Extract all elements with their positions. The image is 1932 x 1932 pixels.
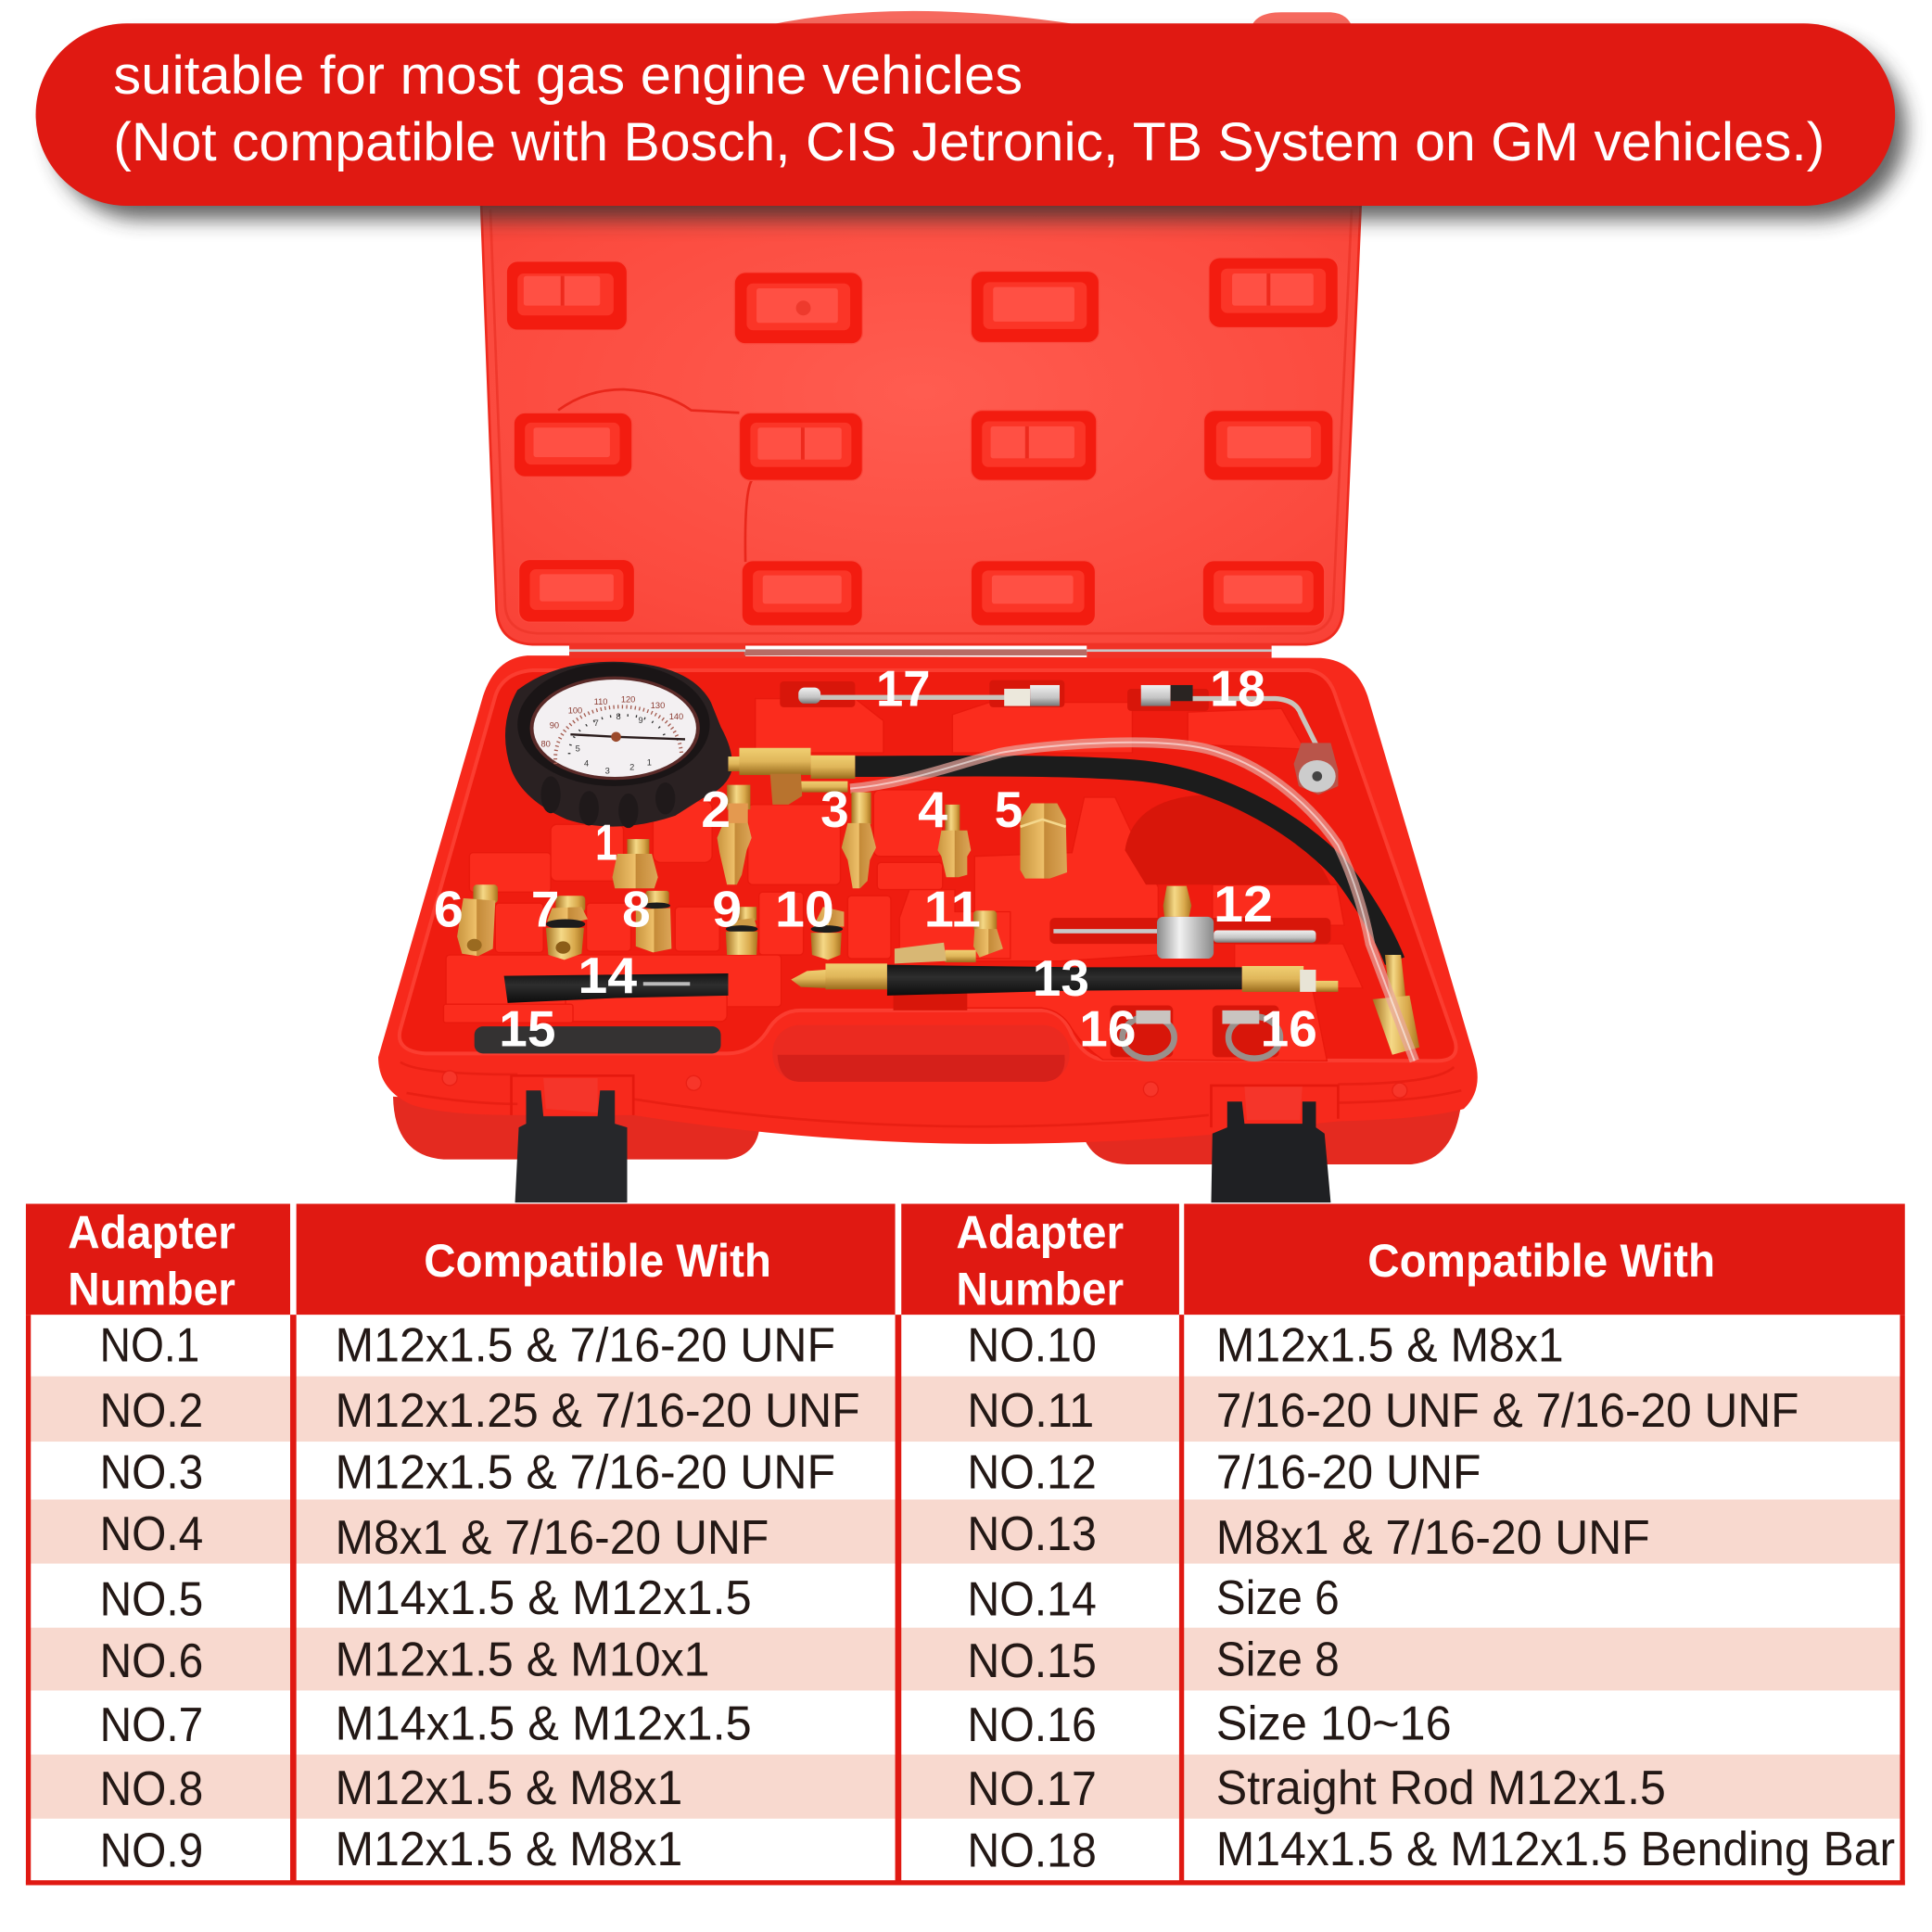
adapter 3 <box>842 793 876 888</box>
adapter numbers left: NO.5 <box>100 1571 203 1625</box>
gauge numbers: 110 <box>594 697 607 706</box>
adapter 4 <box>937 805 971 877</box>
part number labels: 5 <box>995 782 1023 838</box>
table header text: Number <box>68 1262 235 1315</box>
latch right <box>1211 1087 1330 1202</box>
gauge numbers: 140 <box>669 712 683 721</box>
gauge numbers: 90 <box>550 720 559 730</box>
alternating rows <box>31 1377 1900 1819</box>
compatibility values right: 7/16-20 UNF <box>1216 1445 1481 1499</box>
case base <box>378 643 1478 1164</box>
table header text <box>68 1205 1715 1315</box>
part number labels: 17 <box>876 661 930 718</box>
compatibility values right: M8x1 & 7/16-20 UNF <box>1216 1510 1650 1564</box>
gauge numbers: 2 <box>629 763 634 772</box>
table header text: Adapter <box>68 1205 235 1258</box>
latch notches and rivets <box>442 1071 1407 1127</box>
adapter numbers right: NO.17 <box>967 1761 1097 1815</box>
part number labels: 16 <box>1261 1000 1317 1057</box>
recesses <box>780 680 1330 1057</box>
compatibility values right: Straight Rod M12x1.5 <box>1216 1760 1666 1814</box>
gauge numbers: 9 <box>638 716 643 725</box>
rim highlight <box>400 1062 1461 1126</box>
adapter 11 <box>895 910 1003 963</box>
table header text: Adapter <box>956 1205 1124 1258</box>
compatibility values right: M12x1.5 & M8x1 <box>1216 1318 1564 1372</box>
compatibility values left: M14x1.5 & M12x1.5 <box>336 1697 752 1750</box>
compatibility values left: M12x1.5 & M8x1 <box>336 1760 682 1814</box>
adapter 7 <box>546 896 588 960</box>
compatibility values left: M8x1 & 7/16-20 UNF <box>336 1510 769 1564</box>
black hose <box>855 766 1395 961</box>
clamp 16 left <box>1123 1010 1175 1059</box>
clear tube <box>850 743 1415 1061</box>
adapter 1 <box>613 839 658 888</box>
part number labels: 16 <box>1079 1000 1136 1057</box>
table header text: Compatible With <box>424 1234 771 1287</box>
brass T connector <box>728 748 855 805</box>
adapter numbers left: NO.2 <box>100 1383 203 1437</box>
adapter numbers right: NO.14 <box>967 1571 1097 1625</box>
part number labels: 9 <box>712 881 742 937</box>
part number labels: 1 <box>595 815 617 871</box>
table borders <box>26 1315 1905 1885</box>
compatibility values right <box>1216 1318 1895 1875</box>
adapter 18 <box>1141 685 1338 794</box>
compatibility values left: M12x1.5 & M10x1 <box>336 1633 710 1686</box>
adapter numbers right: NO.18 <box>967 1824 1097 1877</box>
part number labels: 12 <box>1214 876 1273 933</box>
adapter 2 <box>718 785 752 884</box>
compatibility values left: M12x1.5 & 7/16-20 UNF <box>336 1318 835 1372</box>
adapter 13 <box>791 963 1338 996</box>
adapter 6 <box>457 884 498 956</box>
compatibility values left: M12x1.5 & 7/16-20 UNF <box>336 1445 835 1499</box>
hinges <box>569 643 1272 658</box>
adapter numbers right: NO.16 <box>967 1697 1097 1751</box>
part number labels: 18 <box>1210 661 1265 718</box>
compatibility values left: M14x1.5 & M12x1.5 <box>336 1570 752 1624</box>
banner <box>36 23 1895 206</box>
gauge numbers: 4 <box>584 759 589 769</box>
part number labels: 3 <box>820 782 849 838</box>
gauge numbers: 120 <box>621 695 635 705</box>
adapter numbers right: NO.12 <box>967 1445 1097 1499</box>
adapter 8 <box>636 891 671 952</box>
adapter numbers left: NO.3 <box>100 1445 203 1499</box>
gauge numbers: 80 <box>540 739 551 748</box>
gauge numbers: 1 <box>647 757 652 767</box>
table header text: Compatible With <box>1367 1234 1715 1287</box>
part number labels: 11 <box>924 881 981 937</box>
compatibility values left: M12x1.5 & M8x1 <box>336 1822 682 1875</box>
adapter 10 <box>811 907 844 960</box>
gauge numbers: 7 <box>594 718 599 728</box>
lid inner edge <box>490 210 1352 633</box>
compatibility values right: M14x1.5 & M12x1.5 Bending Bar <box>1216 1822 1895 1875</box>
adapter 12 <box>1053 886 1316 959</box>
banner shadow <box>52 40 1906 220</box>
gauge dial face <box>533 680 696 777</box>
gauge scales <box>555 706 681 764</box>
part number labels: 10 <box>775 881 834 937</box>
part number labels <box>434 661 1317 1057</box>
table header cells <box>26 1204 1905 1315</box>
brass tube end fitting <box>1373 955 1419 1055</box>
table header text: Number <box>956 1262 1124 1315</box>
banner text line 2: (Not compatible with Bosch, CIS Jetronic, TB System on GM vehicles.) <box>113 112 1824 172</box>
adapter numbers right: NO.13 <box>967 1506 1097 1560</box>
part number labels: 13 <box>1033 950 1089 1007</box>
adapter numbers left: NO.8 <box>100 1761 203 1815</box>
adapter numbers right <box>967 1318 1097 1877</box>
lid pockets <box>506 258 1338 626</box>
part number labels: 14 <box>578 947 638 1004</box>
case lid <box>480 11 1362 644</box>
gauge numbers: 130 <box>651 701 665 710</box>
left foot <box>393 1097 760 1160</box>
adapter numbers left: NO.7 <box>100 1697 203 1751</box>
compatibility values right: Size 6 <box>1216 1570 1340 1624</box>
pressure gauge <box>505 662 732 828</box>
part number labels: 15 <box>499 1000 555 1057</box>
tray floor <box>400 670 1456 1061</box>
shell <box>378 655 1478 1144</box>
compatibility values right: Size 10~16 <box>1216 1697 1452 1750</box>
banner text line 1: suitable for most gas engine vehicles <box>113 45 1023 106</box>
part number labels: 6 <box>434 881 464 937</box>
adapter numbers left: NO.6 <box>100 1633 203 1687</box>
carry handle <box>772 1025 1070 1082</box>
compatibility values right: Size 8 <box>1216 1633 1340 1686</box>
adapter numbers left <box>100 1318 203 1877</box>
hose 15 <box>475 1026 721 1053</box>
table body background <box>26 1315 1905 1885</box>
latch left <box>515 1078 628 1202</box>
part number labels: 4 <box>918 782 948 838</box>
adapter numbers left: NO.4 <box>100 1506 203 1560</box>
lid top arc peeking above banner <box>749 11 1078 30</box>
part number labels: 2 <box>701 782 731 838</box>
right foot <box>1079 1103 1461 1164</box>
compatibility table <box>26 1204 1905 1885</box>
gauge numbers: 5 <box>576 744 580 754</box>
clamp 16 right <box>1222 1010 1280 1059</box>
lid ridge <box>558 389 752 562</box>
hose 14 <box>504 973 728 1003</box>
adapter numbers left: NO.9 <box>100 1824 203 1877</box>
gauge numbers: 100 <box>568 706 582 716</box>
part number labels: 8 <box>622 881 651 937</box>
gauge needle <box>570 734 685 739</box>
foam blocks <box>443 699 1363 1061</box>
adapter 5 <box>1020 804 1067 879</box>
part number labels: 7 <box>531 881 559 937</box>
adapter numbers right: NO.11 <box>967 1383 1094 1437</box>
adapter 17 <box>798 685 1060 706</box>
compatibility values left <box>336 1318 860 1875</box>
compatibility values right: 7/16-20 UNF & 7/16-20 UNF <box>1216 1383 1799 1437</box>
gauge grip lobes <box>540 776 675 828</box>
gauge numbers: 8 <box>616 712 621 721</box>
adapter numbers right: NO.15 <box>967 1633 1097 1687</box>
adapter numbers right: NO.10 <box>967 1318 1097 1372</box>
compatibility values left: M12x1.25 & 7/16-20 UNF <box>336 1383 860 1437</box>
adapter 9 <box>726 907 757 955</box>
adapter numbers left: NO.1 <box>100 1318 199 1372</box>
gauge numbers <box>540 695 683 776</box>
gauge numbers: 3 <box>605 767 610 776</box>
